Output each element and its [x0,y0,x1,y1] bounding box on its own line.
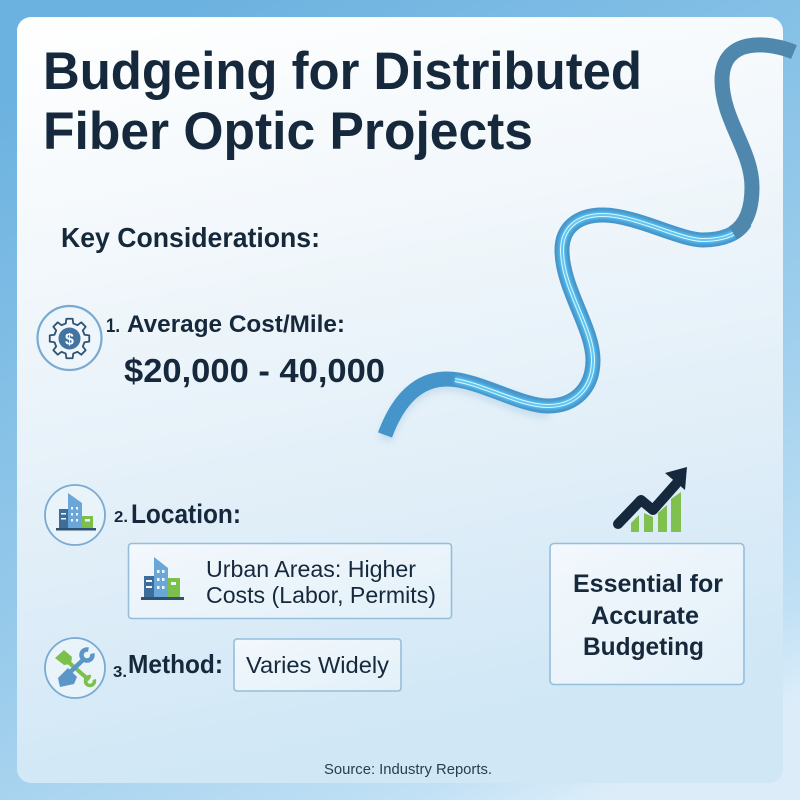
icon: shovel and wrench [45,638,105,698]
source note: Source: Industry Reports. [324,761,492,778]
item 1: average cost per mile: Average Cost/Mile: [127,311,345,338]
icon: growth chart with arrow [618,467,687,532]
panel: essential for accurate budgeting: Accurate [591,602,699,630]
panel: urban areas [128,544,452,618]
item 2: location: 2. [114,509,128,526]
item 3: method: 3. [113,664,127,681]
title: Fiber Optic Projects [43,102,533,161]
icon: gear with dollar [38,306,102,370]
panel: varies widely: Varies Widely [246,652,390,678]
item 1: average cost per mile: $20,000 - 40,000 [124,352,385,389]
title: Budgeing for Distributed [43,42,642,101]
fiber optic cable [385,45,794,440]
panel: essential for accurate budgeting: Essential for [573,570,723,598]
panel: essential for accurate budgeting [550,544,744,684]
icon: gear with dollar: $ [65,332,74,348]
item 3: method: Method: [128,649,223,679]
icon: buildings [141,557,184,600]
item 1: average cost per mile [106,311,385,389]
item 1: average cost per mile: 1. [106,316,120,337]
item 2: location: Location: [131,499,241,529]
panel: varies widely [234,639,401,691]
panel: urban areas: Costs (Labor, Permits) [206,582,436,608]
heading: key considerations: Key Considerations: [61,222,320,253]
title [43,42,642,161]
panel: essential for accurate budgeting: Budgeting [583,633,704,661]
panel: urban areas: Urban Areas: Higher [206,556,416,582]
icon: buildings in circle [45,485,105,545]
